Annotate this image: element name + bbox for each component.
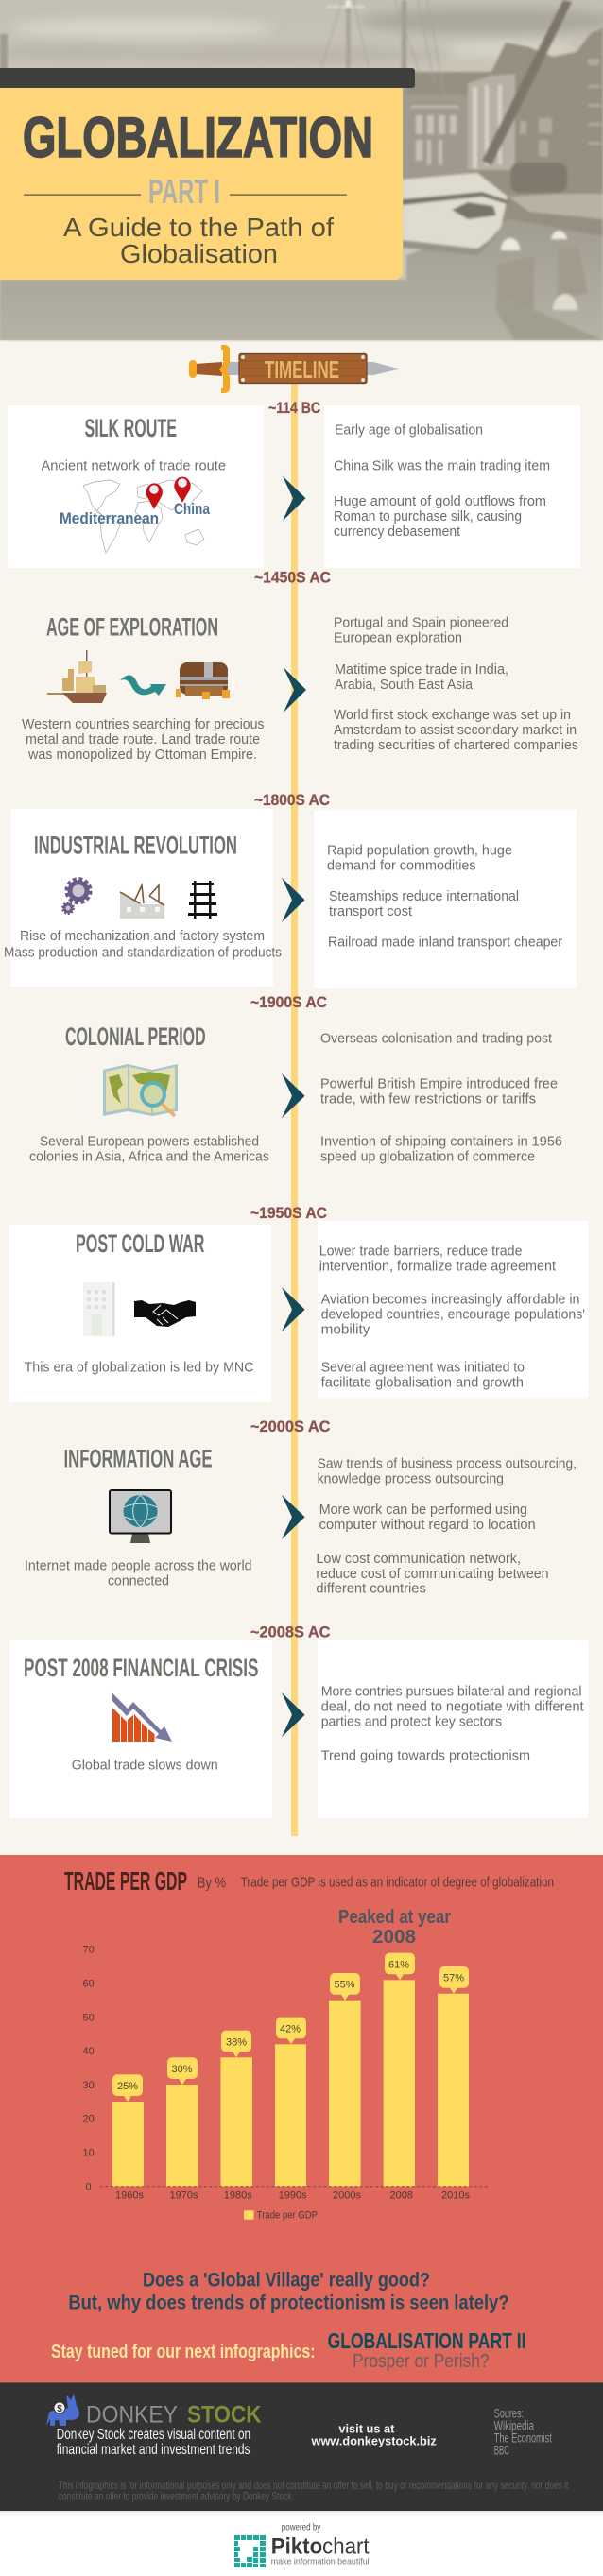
right text: bullet points: trade, with few restrictions or tariffs — [320, 1091, 536, 1107]
panel: industrial left — [10, 809, 273, 987]
panel: trade per GDP — [0, 1855, 603, 2382]
cream strip and white background — [0, 2511, 603, 2576]
chevron arrow — [282, 1287, 305, 1331]
right text: bullet points: Several agreement was initiated to — [321, 1361, 525, 1376]
right text: bullet points: speed up globalization of commerce — [320, 1150, 535, 1165]
y axis labels: 50 — [83, 2012, 95, 2023]
panel: industrial right — [314, 810, 577, 988]
main title: GLOBALIZATION — [23, 106, 373, 169]
heading: INDUSTRIAL REVOLUTION — [34, 831, 237, 859]
right text: bullet points: Steamships reduce international — [329, 889, 519, 904]
date label: ~114 BC — [268, 399, 320, 417]
website — [311, 2421, 437, 2447]
right text: bullet points: More contries pursues bilateral and regional — [321, 1685, 582, 1700]
brand name: STOCK — [187, 2401, 262, 2428]
section: post 2008 financial crisis — [10, 1623, 589, 1818]
date label: ~1800S AC — [254, 791, 330, 809]
date label: ~1900S AC — [250, 993, 327, 1011]
heading: SILK ROUTE — [85, 414, 177, 442]
right text: bullet points: facilitate globalisation and growth — [321, 1376, 524, 1391]
description: Global trade slows down — [72, 1759, 218, 1774]
sword crossguard — [219, 345, 230, 393]
right text: bullet points: mobility — [321, 1322, 370, 1337]
description: Internet made people across the world — [25, 1559, 251, 1574]
panel: crisis left — [10, 1640, 272, 1818]
callouts: 57% — [443, 1973, 464, 1984]
callouts: 61% — [388, 1959, 409, 1970]
brand name — [86, 2401, 262, 2428]
right text: bullet points: Powerful British Empire introduced free — [320, 1076, 558, 1091]
bar chart — [83, 1945, 489, 2221]
right text: bullet points: transport cost — [329, 904, 412, 919]
y axis labels: 40 — [83, 2046, 95, 2057]
disclaimer — [59, 2479, 569, 2502]
right text: bullet points: Matitime spice trade in India, — [335, 662, 508, 678]
right text: bullet points — [316, 1457, 577, 1596]
description: Ancient network of trade route — [42, 458, 226, 473]
icon: sailing ship — [47, 650, 107, 703]
y axis labels: 20 — [83, 2114, 95, 2125]
chevron arrow — [283, 476, 306, 521]
right text: bullet points: Overseas colonisation and trading post — [320, 1031, 552, 1046]
timeline sword banner — [189, 345, 400, 393]
right text: bullet points: deal, do not need to negotiate with different — [321, 1700, 584, 1715]
header photo: harbour with sailing ship — [0, 0, 603, 340]
right text: bullet points: currency debasement — [334, 524, 460, 540]
y axis labels: 30 — [83, 2080, 95, 2091]
piktochart logo mark — [234, 2535, 266, 2567]
peak annotation: 2008 — [372, 1927, 416, 1948]
right text: bullet points: Railroad made inland transport cheaper — [328, 936, 562, 951]
piktochart wordmark: make information beautiful — [271, 2556, 370, 2566]
section: information age — [25, 1417, 577, 1596]
x axis labels: 2010s — [441, 2190, 470, 2202]
timeline label: TIMELINE — [265, 355, 339, 384]
date label: ~2000S AC — [250, 1417, 331, 1435]
icon: folded map with magnifier — [103, 1064, 178, 1116]
y axis labels: 60 — [83, 1979, 95, 1990]
right text: bullet points: reduce cost of communicating between — [316, 1567, 549, 1582]
right text: bullet points — [319, 1244, 585, 1391]
sword blade — [227, 362, 400, 375]
yellow title card — [0, 88, 403, 280]
powered by: powered by — [282, 2522, 320, 2533]
right text: bullet points — [327, 843, 562, 951]
right text: bullet points: intervention, formalize trade agreement — [319, 1259, 556, 1274]
peak annotation — [338, 1907, 451, 1948]
right text: bullet points: More work can be performed using — [319, 1503, 527, 1518]
right text: bullet points: Roman to purchase silk, causing — [334, 509, 522, 524]
date label: ~1450S AC — [254, 569, 331, 587]
panel: silk route left — [8, 405, 264, 568]
axis baseline — [100, 2186, 489, 2188]
x axis labels: 1980s — [224, 2190, 252, 2202]
next part subtitle: Prosper or Perish? — [353, 2351, 490, 2372]
section: silk route — [8, 399, 580, 568]
icon: donkey with money bag — [46, 2394, 79, 2426]
description: colonies in Asia, Africa and the Americas — [29, 1150, 269, 1165]
closing question: Does a 'Global Village' really good? — [143, 2269, 430, 2291]
callouts — [112, 1953, 469, 2102]
x axis labels: 1970s — [170, 2190, 198, 2202]
icon: donkey with money bag: $ — [57, 2404, 62, 2414]
description: Mass production and standardization of products — [4, 946, 282, 961]
legend: Trade per GDP — [257, 2209, 318, 2221]
title panel — [0, 68, 415, 280]
right text: bullet points: Early age of globalisation — [335, 422, 483, 438]
heading: POST COLD WAR — [76, 1229, 204, 1258]
heading: COLONIAL PERIOD — [65, 1022, 206, 1051]
panel: post cold war right — [318, 1221, 588, 1398]
y axis labels: 0 — [85, 2181, 92, 2192]
subtitle: A Guide to the Path of — [63, 213, 334, 242]
map label: China: China — [174, 500, 210, 518]
right text: bullet points: Low cost communication network, — [316, 1552, 521, 1567]
heading: INFORMATION AGE — [64, 1445, 213, 1473]
description — [29, 1135, 269, 1165]
sources: BBC — [494, 2443, 509, 2458]
description: Western countries searching for precious — [22, 717, 265, 732]
icon: gears — [62, 879, 91, 914]
right text: bullet points: Huge amount of gold outflows from — [334, 494, 546, 509]
callouts: 30% — [171, 2064, 193, 2075]
sources: Soures: — [494, 2406, 524, 2421]
description — [22, 717, 265, 763]
right text: bullet points — [334, 422, 550, 540]
sources — [494, 2406, 552, 2458]
right text: bullet points: Arabia, South East Asia — [335, 678, 474, 693]
peak annotation: Peaked at year — [338, 1907, 451, 1928]
right text: bullet points: Rapid population growth, huge — [327, 843, 512, 858]
subtitle — [63, 213, 334, 268]
right text: bullet points: Invention of shipping containers in 1956 — [320, 1135, 562, 1150]
x axis labels: 2008 — [389, 2190, 413, 2202]
wooden sign — [239, 353, 367, 384]
panel: silk route right — [324, 405, 580, 568]
icon: treasure chest — [176, 662, 230, 699]
part label with side rules: PART I — [148, 172, 220, 211]
callouts: 25% — [117, 2081, 138, 2092]
right text: bullet points: demand for commodities — [327, 858, 476, 873]
icon: factory — [120, 885, 164, 919]
pin: China — [174, 477, 191, 503]
icon: handshake — [134, 1300, 196, 1327]
x axis labels: 2000s — [333, 2190, 361, 2202]
unit label: By % — [198, 1876, 226, 1892]
right text: bullet points: computer without regard to location — [319, 1518, 536, 1533]
section: colonial period — [29, 993, 562, 1165]
heading: POST 2008 FINANCIAL CRISIS — [24, 1654, 258, 1682]
sword grip — [195, 362, 222, 376]
icon: falling chart — [112, 1693, 172, 1742]
right text: bullet points: knowledge process outsourcing — [318, 1472, 504, 1487]
sources: Wikipedia — [494, 2418, 534, 2433]
icon: teal route arrow — [120, 675, 166, 696]
icon: computer monitor with globe — [110, 1490, 171, 1543]
right text: bullet points — [320, 1031, 562, 1165]
bars — [112, 1980, 469, 2187]
pin: Mediterranean — [146, 483, 163, 509]
map label: Mediterranean: Mediterranean — [60, 509, 159, 527]
right text: bullet points: developed countries, encourage populations' — [321, 1307, 585, 1322]
right text: bullet points: China Silk was the main trading item — [334, 458, 550, 473]
heading: AGE OF EXPLORATION — [46, 613, 218, 642]
chevron arrow — [282, 1692, 305, 1737]
description: Several European powers established — [40, 1135, 259, 1150]
chevron arrow — [282, 878, 305, 922]
right text: bullet points: parties and protect key sectors — [321, 1715, 502, 1730]
right text: bullet points — [334, 616, 578, 753]
brand description: financial market and investment trends — [57, 2442, 250, 2458]
section: post cold war — [9, 1204, 588, 1402]
right text: bullet points: Aviation becomes increasingly affordable in — [321, 1292, 580, 1307]
callouts: 55% — [334, 1980, 355, 1991]
right text: bullet points: Saw trends of business process outsourcing, — [318, 1457, 577, 1472]
right text: bullet points: World first stock exchange was set up in — [334, 708, 571, 723]
icon: world map with pins — [60, 477, 210, 553]
closing question — [68, 2269, 509, 2313]
chart heading: TRADE PER GDP — [64, 1866, 187, 1896]
x axis labels: 1960s — [115, 2190, 144, 2202]
right text: bullet points: trading securities of chartered companies — [334, 738, 578, 753]
icon: railroad track — [188, 881, 217, 919]
description — [4, 929, 282, 961]
footer panel — [0, 2382, 603, 2511]
dark footer background — [0, 2382, 603, 2511]
description: connected — [108, 1574, 169, 1589]
date label: ~1950S AC — [250, 1204, 327, 1222]
section: industrial revolution — [4, 791, 577, 988]
right text: bullet points: different countries — [316, 1581, 426, 1596]
timeline vertical bar — [291, 383, 298, 1836]
website: visit us at — [338, 2421, 395, 2435]
piktochart wordmark: Piktochart — [271, 2533, 370, 2559]
sources: The Economist — [494, 2430, 552, 2446]
chevron arrow — [282, 1073, 305, 1118]
closing question: But, why does trends of protectionism is seen lately? — [68, 2292, 509, 2313]
right text: bullet points: Portugal and Spain pioneered — [334, 616, 508, 631]
next part title: GLOBALISATION PART II — [328, 2328, 525, 2353]
description — [25, 1559, 251, 1589]
stay tuned line: Stay tuned for our next infographics: — [51, 2342, 316, 2362]
date label: ~2008S AC — [250, 1623, 331, 1640]
right text: bullet points: Amsterdam to assist secondary market in — [334, 723, 577, 738]
website: www.donkeystock.biz — [311, 2433, 437, 2447]
chevron arrow — [282, 1495, 305, 1539]
red background — [0, 1855, 603, 2382]
piktochart credit — [0, 2511, 603, 2576]
callouts: 38% — [226, 2036, 247, 2048]
disclaimer: constitute an offer to provide investment advisory by Donkey Stock. — [59, 2489, 294, 2502]
right text: bullet points: European exploration — [334, 631, 462, 646]
section: age of exploration — [22, 569, 578, 763]
brand name: DONKEY — [86, 2401, 178, 2428]
x axis labels: 1990s — [279, 2190, 307, 2202]
brand description — [57, 2427, 250, 2458]
y axis labels: 10 — [83, 2147, 95, 2158]
subtitle: Globalisation — [120, 239, 278, 268]
brand description: Donkey Stock creates visual content on — [57, 2427, 250, 2443]
dark title bar — [0, 68, 415, 88]
right text: bullet points — [321, 1685, 584, 1764]
right text: bullet points: Trend going towards protectionism — [321, 1749, 530, 1764]
icon: office building — [83, 1282, 115, 1336]
description: Rise of mechanization and factory system — [20, 929, 265, 944]
y axis labels — [83, 1945, 95, 2192]
y axis labels: 70 — [83, 1945, 95, 1956]
sword pommel — [189, 360, 197, 378]
description: metal and trade route. Land trade route — [26, 732, 260, 747]
panel: crisis right — [318, 1640, 588, 1818]
x axis labels — [115, 2190, 470, 2202]
callouts: 42% — [280, 2023, 301, 2035]
description: This era of globalization is led by MNC — [25, 1360, 253, 1375]
right text: bullet points: Lower trade barriers, reduce trade — [319, 1244, 522, 1259]
chevron arrow — [284, 667, 306, 713]
description: was monopolized by Ottoman Empire. — [27, 747, 257, 763]
panel: post cold war left — [9, 1225, 271, 1402]
